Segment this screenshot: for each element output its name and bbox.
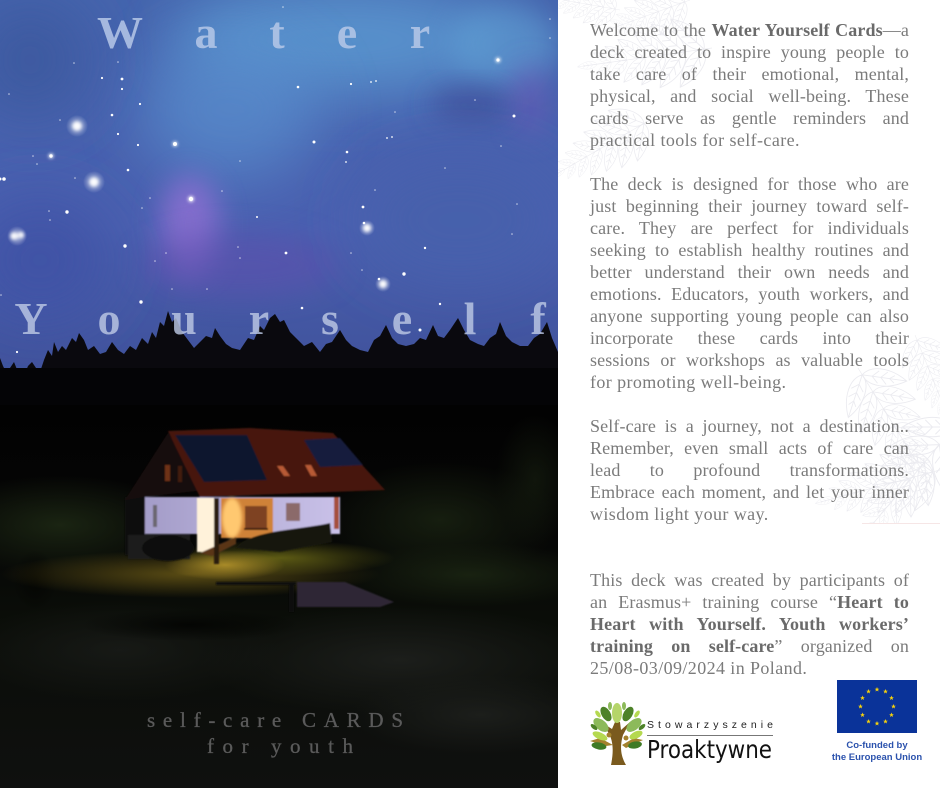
text block: journey: wisdom light your way. [590, 504, 769, 524]
text block: audience: anyone supporting young people can also [590, 306, 909, 326]
night sky [0, 0, 560, 380]
text block: welcome: Welcome to the Water Yourself Cards—a [590, 20, 909, 40]
text block: credits [590, 570, 909, 678]
decorative leaves: top left of text panel [533, 0, 718, 207]
text block: audience: seeking to establish healthy routines and [590, 240, 909, 260]
title: Yourself: Yourself [14, 293, 546, 344]
title: Water: Water [97, 7, 430, 58]
subtitle: for youth [207, 734, 354, 758]
door glow [197, 498, 216, 552]
text block: audience: for promoting well-being. [590, 372, 786, 392]
logo: Stowarzyszenie Proaktywne: Proaktywne [647, 735, 772, 764]
wall [143, 497, 340, 534]
stars [0, 6, 551, 353]
logo text: Stowarzyszenie [647, 719, 773, 731]
text block: credits: This deck was created by participants of [590, 570, 909, 590]
bushes and steps [142, 535, 194, 561]
house [125, 428, 385, 564]
text block: welcome: deck created to inspire young people to [590, 42, 909, 62]
dark meadow [0, 423, 558, 788]
flag caption [832, 740, 922, 763]
text block: audience: just beginning their journey toward self- [590, 196, 909, 216]
subtitle [147, 708, 403, 758]
text block: audience: incorporate these cards into their [590, 328, 909, 348]
lit path and grass [19, 543, 383, 596]
gable [125, 433, 205, 500]
text block: credits: 25/08-03/09/2024 in Poland. [590, 658, 807, 678]
roof [168, 428, 385, 497]
solar panels [175, 435, 267, 482]
text block: welcome: take care of their emotional, mental, [590, 64, 909, 84]
text block: welcome [590, 20, 909, 150]
text block: credits: training on self-care” organized on [590, 636, 909, 656]
flag caption: Co-funded by [846, 740, 908, 751]
text block: audience: emotions. Educators, youth workers, and [590, 284, 909, 304]
logo: EU flag [832, 680, 922, 763]
flag caption: the European Union [832, 752, 922, 763]
icon: tree [590, 702, 646, 765]
text block: journey: lead to profound transformations. [590, 460, 909, 480]
logo: Stowarzyszenie Proaktywne [590, 702, 773, 765]
text block: audience: care. They are perfect for individuals [590, 218, 909, 238]
text block: credits: Heart with Yourself. Youth workers’ [590, 614, 909, 634]
text block: welcome: practical tools for self-care. [590, 130, 800, 150]
photo panel: starry sky, forest and lit house [0, 0, 610, 788]
text block: journey: Embrace each moment, and let your inner [590, 482, 909, 502]
text block: audience: better understand their own needs and [590, 262, 909, 282]
subtitle: self-care CARDS [147, 708, 403, 732]
forest silhouette [0, 311, 558, 405]
pond [216, 581, 394, 608]
text block: audience: The deck is designed for those who are [590, 174, 909, 194]
text block: welcome: physical, and social well-being. These [590, 86, 909, 106]
text block: audience: sessions or workshops as valuable tools [590, 350, 909, 370]
text block: audience [590, 174, 909, 392]
text block: credits: an Erasmus+ training course “Heart to [590, 592, 909, 612]
text block: journey [590, 416, 909, 524]
text block: journey: Remember, even small acts of care can [590, 438, 909, 458]
text block: welcome: cards serve as gentle reminders and [590, 108, 909, 128]
decorative leaves: lower right of text panel [700, 325, 940, 788]
text block: journey: Self-care is a journey, not a destination.. [590, 416, 909, 436]
